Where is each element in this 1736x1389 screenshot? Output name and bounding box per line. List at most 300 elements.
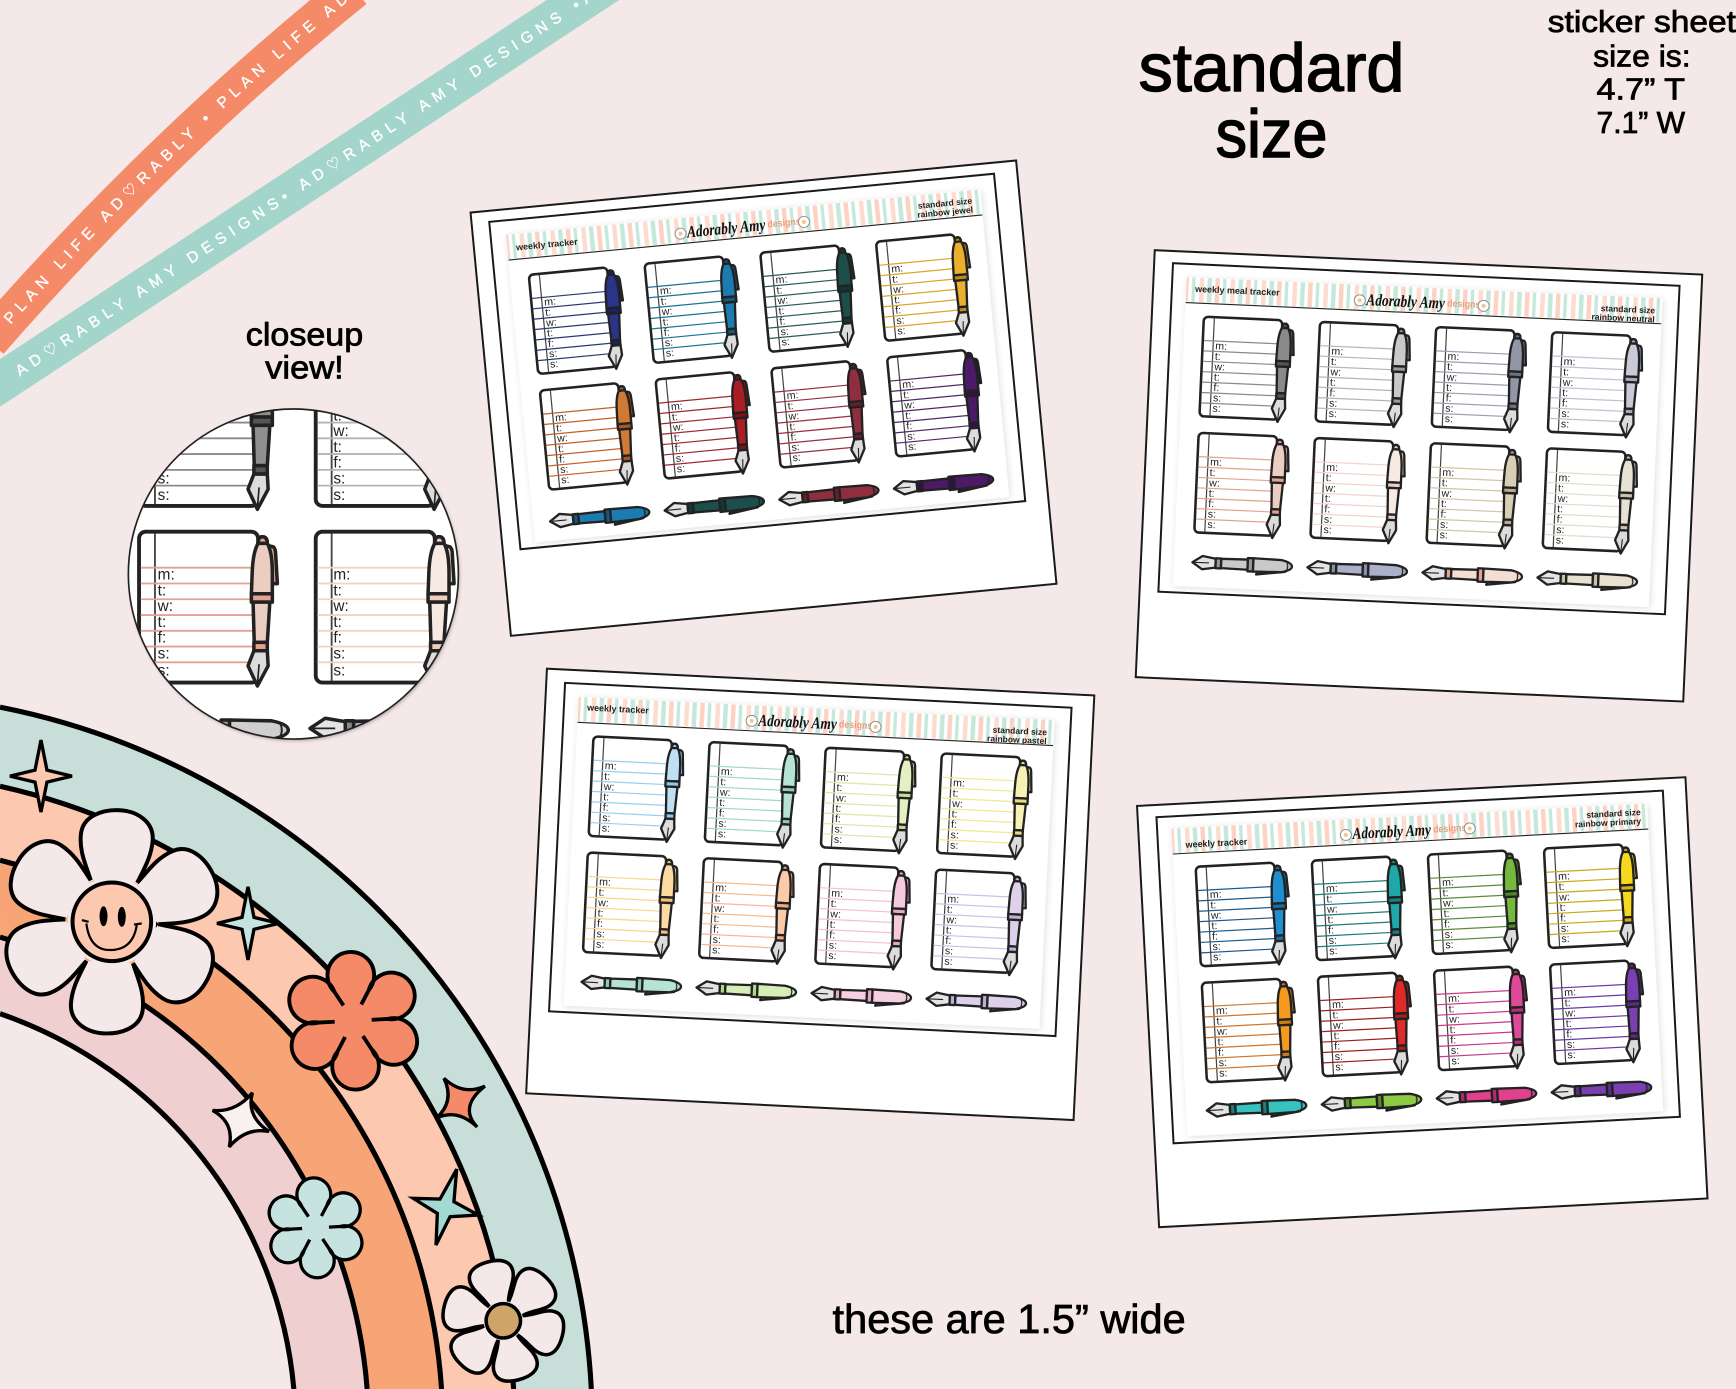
sticker: dark grey [1199, 317, 1295, 422]
sticker: lilac: f: [945, 935, 952, 947]
closeup magnifier circle: w: [332, 598, 349, 615]
sticker: tan: f: [1440, 508, 1447, 521]
closeup magnifier circle: t: [333, 439, 342, 456]
sticker: blush: s: [1207, 519, 1216, 531]
sticker: ivory: t: [1558, 482, 1564, 495]
sticker: lilac: m: [947, 893, 960, 906]
sheet header: rainbow neutral [1591, 312, 1655, 324]
sticker: magenta: t: [1448, 1003, 1455, 1015]
icon: white star [213, 1093, 269, 1147]
text: these are 1.5 inch wide: these are 1.5” wide [833, 1296, 1186, 1342]
sticker: orange: w: [1216, 1026, 1228, 1038]
sticker: teal: t: [778, 305, 785, 318]
sheet header: weekly tracker [586, 703, 650, 716]
sheet header: standard size [992, 725, 1048, 737]
sticker: yellow: s: [1561, 922, 1569, 935]
sticker: red: t: [671, 411, 678, 424]
heading: closeup view [246, 316, 363, 386]
sticker: navy: m: [544, 296, 557, 309]
sticker: orange: t: [1217, 1036, 1224, 1048]
sticker: slate: s: [1445, 403, 1454, 415]
sticker: lilac: w: [945, 914, 957, 927]
sticker: maroon: s: [791, 441, 800, 454]
sticker: teal: f: [779, 315, 786, 328]
icon: coral flower [287, 949, 419, 1093]
sticker: pink: t: [831, 898, 837, 910]
sticker: sky: s: [601, 822, 610, 835]
icon: peach sparkle [10, 740, 72, 812]
sticker: green: s: [1445, 939, 1454, 951]
closeup magnifier circle: t: [158, 582, 166, 599]
text: sticker sheet size [1548, 4, 1736, 140]
sticker: green: t: [1442, 887, 1449, 899]
sticker: light grey: f: [1329, 387, 1336, 399]
sticker: navy: w: [545, 316, 557, 329]
sticker: apricot: s: [596, 939, 605, 951]
sheet header: designs [839, 719, 873, 732]
sticker: ivory: m: [1558, 472, 1571, 484]
sticker: teal: s: [1328, 935, 1337, 947]
sticker: orange: m: [1216, 1005, 1228, 1017]
closeup magnifier circle: t: [333, 614, 342, 631]
sticker: tan: m: [1442, 467, 1454, 479]
sticker: tan [1426, 443, 1522, 549]
sticker: cream: t: [1326, 472, 1332, 484]
closeup magnifier circle: w: [332, 423, 349, 440]
sticker: periwinkle [1548, 332, 1644, 438]
panel: sheet rainbow primary [1137, 777, 1707, 1227]
sticker: periwinkle: s: [1561, 418, 1569, 431]
sticker grid [1196, 844, 1647, 1085]
heading: standard size [1139, 31, 1404, 172]
sticker: pale yellow: t: [952, 788, 959, 800]
sticker: magenta: m: [1448, 992, 1460, 1005]
sticker: peach: m: [715, 882, 727, 894]
sticker: dark grey: w: [1213, 361, 1225, 374]
closeup magnifier circle: m: [158, 566, 175, 583]
closeup magnifier circle: s: [158, 470, 170, 487]
sticker: navy [529, 266, 629, 376]
closeup magnifier circle: t: [158, 614, 166, 631]
sticker: magenta: w: [1448, 1013, 1460, 1026]
rainbow [0, 707, 591, 1389]
text: sticker sheet size: size is: [1593, 38, 1691, 73]
sticker: blue: s: [665, 347, 675, 360]
closeup magnifier circle: f: [333, 455, 342, 472]
sticker: pale lime [821, 748, 917, 854]
closeup magnifier circle: s: [333, 662, 345, 679]
closeup magnifier circle: f: [158, 630, 166, 647]
sticker: purple: s: [907, 430, 916, 443]
sheet header: standard size [1586, 807, 1641, 820]
sticker: orange [1202, 978, 1298, 1085]
sheet header: weekly tracker [515, 237, 579, 253]
sticker: dark grey: t: [1214, 372, 1220, 384]
sticker: pale lime: t: [835, 803, 842, 815]
sticker: periwinkle: w: [1562, 377, 1574, 389]
sticker: sky: m: [605, 760, 617, 773]
sticker: blue: t: [1210, 899, 1217, 912]
sticker: red: m: [1332, 999, 1344, 1011]
sticker: magenta: f: [1450, 1034, 1457, 1047]
sticker: maroon: t: [789, 421, 796, 433]
sticker: apricot [583, 852, 679, 959]
sticker: cream: m: [1326, 462, 1338, 474]
sticker: purple: t: [903, 389, 910, 402]
sticker: red: t: [1332, 1009, 1339, 1022]
sticker: green: w: [1442, 897, 1454, 910]
sticker: tan: s: [1439, 529, 1448, 542]
sticker: sky [589, 736, 685, 843]
sticker: periwinkle: s: [1561, 408, 1570, 420]
sticker: teal [760, 244, 861, 354]
sticker: apricot: t: [598, 887, 605, 899]
sticker: slate [1432, 327, 1527, 433]
sticker: dark grey: s: [1213, 392, 1222, 405]
sticker: red: s: [1334, 1051, 1343, 1063]
sticker: purple [887, 349, 988, 459]
sticker: tan: s: [1440, 519, 1449, 531]
closeup magnifier circle: s: [333, 646, 345, 663]
sticker: pale yellow: t: [951, 808, 958, 821]
sticker: light grey: w: [1329, 366, 1341, 379]
sticker: lilac: s: [944, 956, 953, 968]
sticker: orange: t: [558, 443, 565, 455]
sticker: red: w: [1332, 1019, 1344, 1032]
sticker: gold: m: [891, 262, 904, 275]
sheet header: rainbow primary [1575, 816, 1642, 829]
sticker: violet: s: [1567, 1049, 1576, 1061]
icon: mint star [413, 1169, 478, 1245]
sticker: pale yellow: f: [951, 819, 957, 831]
sheet header: standard size [917, 196, 973, 211]
sticker: blue: f: [1212, 930, 1218, 943]
sheet header: rainbow jewel [917, 204, 973, 220]
sticker: gold: s: [897, 325, 906, 338]
sticker: slate: m: [1447, 351, 1460, 363]
sheet header: rainbow pastel [987, 733, 1047, 746]
sticker: cream [1310, 438, 1406, 544]
closeup magnifier circle: t: [333, 408, 342, 425]
sticker: pale yellow: m: [953, 777, 965, 790]
sticker: gold: t: [894, 294, 901, 307]
sticker: yellow: w: [1558, 891, 1570, 904]
sticker: dark grey: m: [1215, 340, 1227, 353]
sticker: blush: f: [1208, 498, 1214, 510]
sticker: gold: t: [892, 273, 899, 286]
closeup magnifier circle: s: [158, 487, 170, 504]
sticker: sky: w: [602, 781, 615, 793]
sticker: purple: f: [906, 420, 913, 433]
sticker: blue: w: [1210, 909, 1222, 922]
sticker: apricot: m: [599, 876, 611, 889]
sticker: seafoam: w: [719, 787, 731, 799]
sticker: peach: w: [713, 903, 725, 915]
sticker: ivory: t: [1557, 503, 1563, 515]
icon: smiley daisy [0, 804, 233, 1039]
sticker: apricot: s: [596, 928, 605, 941]
sticker: red: t: [673, 432, 680, 444]
sticker: orange: w: [556, 432, 568, 445]
sticker: red: s: [1335, 1061, 1344, 1074]
sticker: orange [540, 382, 640, 492]
sticker: ivory: f: [1556, 514, 1563, 526]
text: sticker sheet size: sticker sheet [1548, 4, 1736, 39]
sticker: pink: s: [829, 940, 837, 952]
closeup magnifier circle: s: [333, 470, 345, 487]
sticker: navy: t: [545, 306, 552, 319]
sticker: cream: w: [1324, 482, 1336, 495]
pen row [1192, 556, 1637, 591]
sticker: blue: s: [664, 337, 674, 349]
sticker: maroon [771, 360, 872, 470]
sticker: periwinkle: t: [1562, 387, 1568, 399]
sticker: red: w: [671, 421, 684, 434]
sticker: dark grey: t: [1215, 351, 1221, 363]
sticker: seafoam: s: [718, 818, 727, 830]
sticker: magenta: s: [1451, 1055, 1460, 1067]
sticker: peach [699, 858, 795, 964]
sheet header: Adorably Amy [685, 215, 767, 242]
sticker: apricot: w: [597, 897, 609, 909]
sticker: blue: s: [1213, 951, 1222, 964]
text: sticker sheet size: 7.1” W [1596, 105, 1686, 140]
sticker: sky: t: [603, 791, 609, 804]
sticker grid [1194, 317, 1644, 554]
sticker: blue [1196, 862, 1292, 968]
sticker: light grey: t: [1330, 377, 1336, 389]
sticker: pink: m: [831, 888, 843, 900]
pen row [1206, 1081, 1652, 1120]
heading: standard size: standard [1139, 31, 1404, 106]
sticker: pale lime: m: [837, 771, 849, 784]
icon: coral star [436, 1078, 485, 1127]
sticker: dark grey: s: [1212, 403, 1221, 415]
sticker: lilac: t: [947, 904, 953, 916]
sticker: purple: s: [908, 441, 917, 453]
sticker: light grey: m: [1331, 345, 1343, 358]
sticker: purple: w: [903, 399, 916, 412]
closeup magnifier circle: s: [333, 487, 345, 504]
sticker: pale lime: s: [834, 834, 843, 846]
sticker: peach: f: [713, 923, 719, 936]
sheet header [578, 697, 1054, 746]
sticker: peach: t: [714, 892, 721, 905]
sticker: red: s: [675, 452, 685, 465]
sticker: periwinkle: m: [1563, 356, 1576, 368]
sticker: violet: w: [1564, 1007, 1576, 1020]
sticker: yellow: t: [1558, 881, 1565, 893]
sheet header: designs [1447, 298, 1481, 311]
sticker: teal: f: [1328, 924, 1334, 937]
closeup magnifier circle: m: [333, 566, 350, 583]
panel: sheet rainbow pastel [526, 669, 1094, 1120]
sticker: slate: f: [1445, 392, 1452, 405]
sticker: pink: t: [830, 919, 836, 931]
sheet header: weekly tracker [1184, 837, 1248, 850]
sticker: teal: s: [780, 326, 789, 338]
sticker: green: f: [1444, 918, 1450, 931]
sticker: seafoam [705, 742, 801, 848]
sticker: apricot: t: [597, 907, 604, 920]
sticker: seafoam: f: [719, 807, 725, 820]
sticker: ivory: s: [1556, 524, 1565, 536]
sticker: ivory: s: [1555, 534, 1564, 547]
sticker: blue: m: [659, 284, 672, 298]
closeup magnifier circle: t: [333, 582, 342, 599]
sticker: violet: m: [1564, 986, 1576, 999]
sticker: ivory [1543, 448, 1638, 554]
sticker: light grey: t: [1331, 356, 1337, 368]
sticker: pink: w: [829, 908, 841, 921]
sticker: gold [876, 233, 977, 343]
sticker: magenta: s: [1451, 1045, 1459, 1057]
sticker: light grey [1315, 322, 1411, 428]
sticker: slate: t: [1446, 382, 1452, 394]
pen row [581, 975, 1026, 1013]
sticker: lilac: s: [945, 945, 953, 958]
sticker: red: s: [676, 463, 686, 475]
icon: mint sparkle [217, 887, 279, 960]
sticker: blue: m: [1210, 889, 1222, 901]
sheet header: Adorably Amy [757, 711, 838, 733]
sticker: peach: s: [712, 944, 721, 957]
sticker: orange: s: [1219, 1067, 1228, 1080]
sticker: blue: t: [660, 295, 667, 308]
sticker: maroon: m: [786, 389, 799, 402]
sticker: seafoam: s: [718, 828, 726, 841]
sticker: teal: t: [776, 284, 783, 297]
closeup magnifier circle: s: [158, 646, 170, 663]
sticker: blue: t: [1211, 920, 1218, 932]
sticker: red [656, 371, 756, 481]
sticker: pink [815, 864, 911, 970]
sticker: peach: s: [712, 934, 721, 946]
sticker: tan: t: [1441, 498, 1447, 510]
sticker: peach: t: [713, 913, 720, 925]
sticker: purple: t: [905, 410, 912, 422]
sticker: gold: f: [895, 304, 902, 317]
sticker: red: m: [670, 400, 683, 413]
sticker: seafoam: m: [721, 766, 733, 778]
sticker: navy: s: [549, 348, 558, 360]
sticker: sky: t: [604, 770, 610, 783]
sticker: orange: f: [559, 453, 566, 466]
sticker: periwinkle: t: [1563, 366, 1569, 378]
sticker: gold: s: [896, 315, 905, 327]
sticker: seafoam: t: [719, 797, 726, 809]
sticker: maroon: f: [790, 431, 797, 444]
sticker: cream: s: [1323, 524, 1332, 536]
pen row [549, 473, 994, 531]
sticker: orange: s: [1218, 1057, 1227, 1069]
sticker: yellow: m: [1558, 870, 1570, 883]
closeup magnifier circle: f: [333, 630, 342, 647]
sticker: navy: f: [548, 338, 555, 350]
sticker: orange: t: [556, 422, 563, 435]
sticker: blue: w: [660, 305, 673, 318]
sticker: blue: f: [663, 326, 670, 339]
sheet header: weekly meal tracker [1194, 284, 1280, 298]
sticker: pale yellow: s: [950, 829, 959, 841]
sticker: navy: t: [547, 327, 554, 340]
icon: small daisy [426, 1245, 581, 1389]
sheet header: designs [1433, 823, 1467, 836]
heading: closeup view: closeup [246, 316, 363, 352]
sticker: yellow: t: [1559, 902, 1566, 914]
sticker: cream: t: [1325, 493, 1331, 505]
sticker: tan: w: [1440, 488, 1452, 500]
sticker: pale lime: f: [835, 813, 841, 825]
sticker: pink: f: [829, 929, 835, 941]
sticker: red: t: [1333, 1030, 1340, 1042]
sticker: yellow: f: [1560, 912, 1567, 924]
sheet header [1171, 804, 1648, 854]
sticker: seafoam: t: [720, 776, 727, 788]
sticker: blush: s: [1208, 508, 1216, 521]
closeup magnifier circle: s: [158, 662, 170, 679]
sticker: slate: s: [1445, 413, 1453, 425]
sticker: cream: f: [1324, 503, 1331, 515]
heading: standard size: size [1216, 97, 1327, 172]
sticker grid [583, 736, 1033, 976]
sticker: sky: f: [602, 802, 609, 814]
text: sticker sheet size: 4.7” T [1596, 72, 1685, 107]
sticker: teal: m: [775, 273, 788, 287]
sticker: teal: t: [1326, 893, 1333, 905]
sticker: ivory: w: [1556, 493, 1568, 505]
sticker: violet: t: [1564, 997, 1571, 1009]
sticker: blush: t: [1208, 488, 1215, 500]
sticker: pale lime: t: [836, 782, 843, 794]
sticker: violet [1550, 960, 1647, 1066]
sticker: apricot: f: [597, 918, 603, 930]
sticker: lilac: t: [946, 924, 952, 937]
sticker: maroon: w: [787, 410, 800, 423]
sticker: blush: m: [1210, 456, 1222, 469]
sticker: green [1428, 850, 1524, 956]
sticker: sky: s: [602, 812, 611, 824]
sticker: teal: s: [781, 336, 790, 349]
panel: sheet rainbow jewel [471, 161, 1056, 636]
sticker: magenta: t: [1449, 1024, 1456, 1036]
sticker: teal: w: [1326, 903, 1338, 916]
sticker: yellow: s: [1561, 933, 1570, 945]
sticker: orange: s: [560, 463, 569, 476]
sticker: red [1318, 972, 1414, 1078]
sticker: orange: m: [555, 411, 568, 424]
closeup magnifier circle: w: [157, 598, 173, 615]
sticker: teal: t: [1327, 914, 1334, 926]
sheet header: Adorably Amy [1365, 290, 1446, 313]
sticker: magenta [1434, 966, 1530, 1072]
sheet header: standard size [1601, 303, 1656, 316]
sticker: teal: s: [1329, 945, 1338, 957]
heading: closeup view: view! [265, 350, 344, 386]
sticker: violet: s: [1567, 1039, 1576, 1051]
sticker: blue [644, 255, 745, 365]
sticker: lilac [931, 870, 1027, 976]
sticker: pale yellow: w: [951, 798, 963, 810]
sheet header: Adorably Amy [1351, 820, 1432, 843]
sticker: yellow [1544, 844, 1640, 950]
sheet header [506, 190, 982, 260]
sticker: light grey: s: [1329, 397, 1338, 410]
sticker: pale lime: s: [834, 823, 843, 836]
sticker: green: m: [1442, 876, 1454, 889]
sticker: pale lime: w: [835, 792, 847, 805]
sticker: purple: m: [902, 378, 915, 391]
